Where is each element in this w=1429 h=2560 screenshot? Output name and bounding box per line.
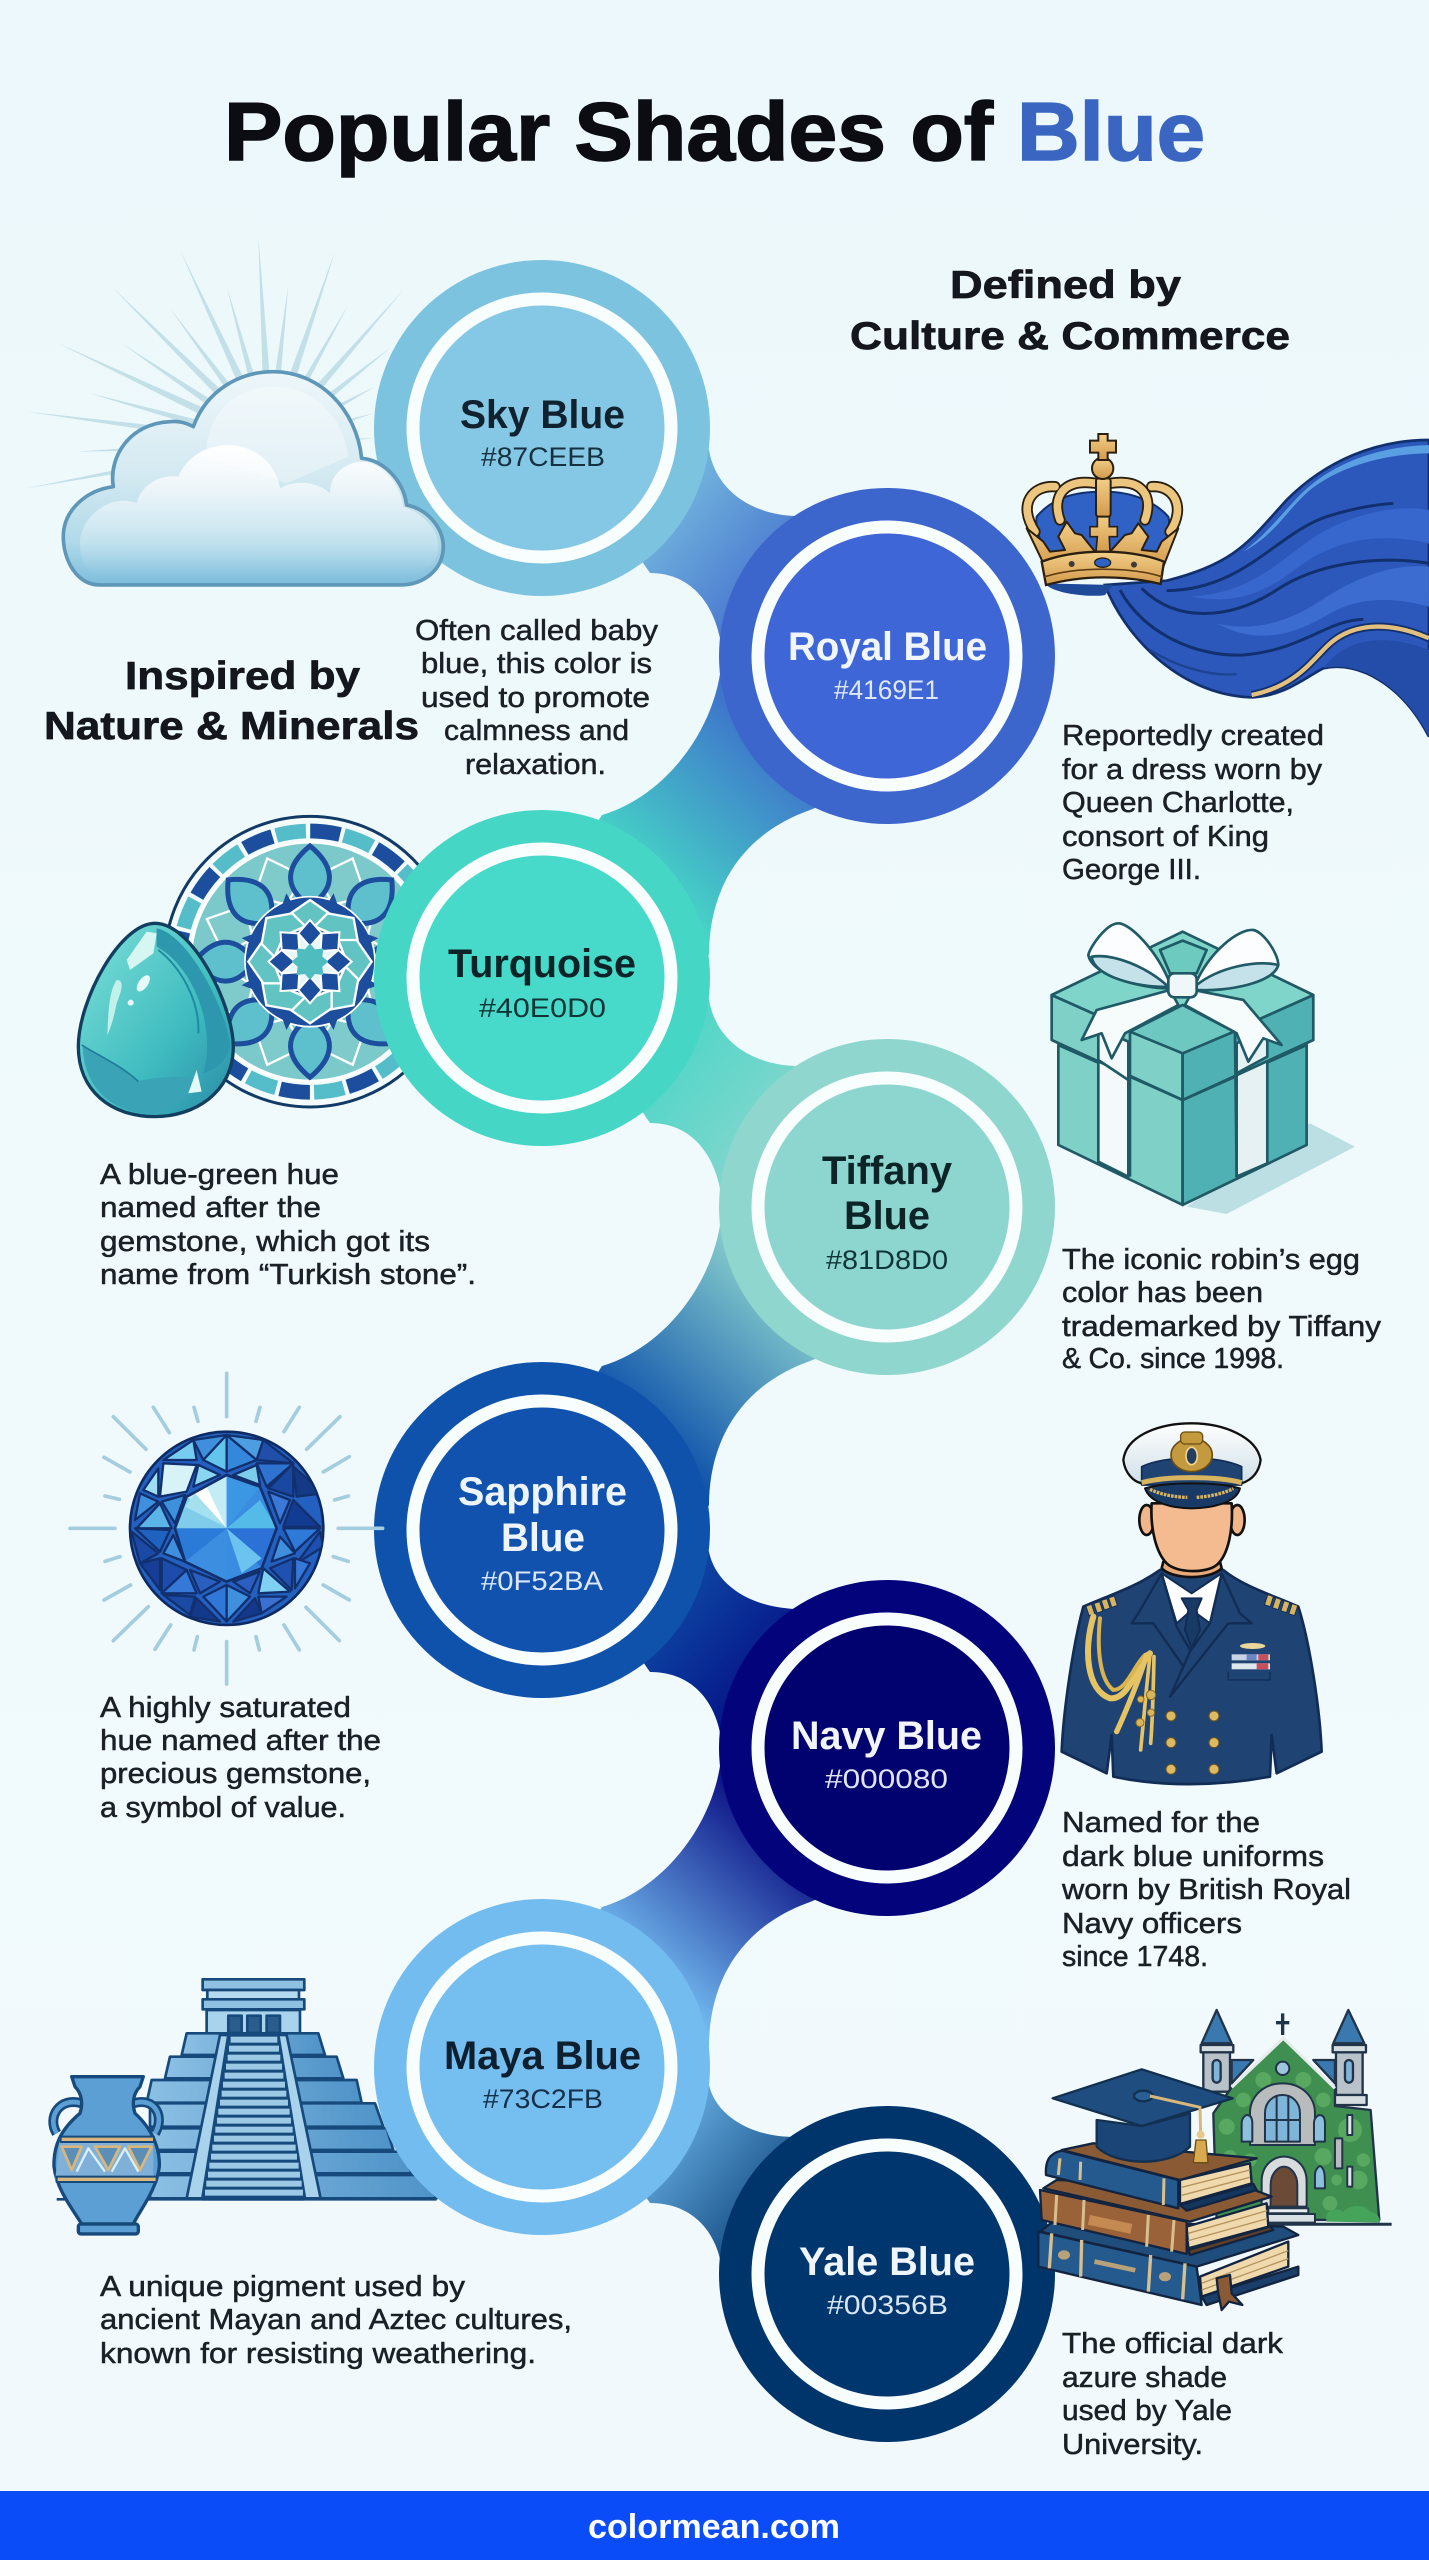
icon: crown and royal drape (1027, 434, 1429, 737)
circle: Navy Blue (719, 1580, 1055, 1916)
circle: Yale Blue: Yale Blue (799, 2240, 975, 2284)
text: Yale Blue description: University. (1062, 2429, 1203, 2461)
drape (1105, 440, 1429, 737)
text: Navy Blue description: worn by British Royal (1061, 1874, 1351, 1906)
circle: Sky Blue (374, 260, 710, 596)
text: Sky Blue description (415, 615, 659, 781)
text: Sapphire Blue description: A highly saturated (100, 1692, 351, 1724)
text: Sky Blue description: relaxation. (465, 749, 606, 781)
circle: Tiffany Blue: #81D8D0 (826, 1245, 948, 1275)
text: Tiffany Blue description: trademarked by Tiffany (1062, 1311, 1382, 1343)
heading: inspired by nature and minerals: Inspired by (125, 655, 360, 698)
circle: Sapphire Blue: Sapphire (458, 1470, 627, 1514)
text: Yale Blue description: The official dark (1062, 2328, 1284, 2360)
front puffs (80, 445, 438, 577)
circle: Navy Blue: Navy Blue (791, 1714, 982, 1758)
vase (53, 2077, 159, 2234)
icon: books, graduation cap and ivy church (1038, 2010, 1392, 2310)
rays (70, 1373, 383, 1684)
text: Maya Blue description: A unique pigment used by (100, 2271, 466, 2303)
text: Navy Blue description (1061, 1807, 1351, 1973)
circle: Sapphire Blue: Blue (501, 1516, 585, 1560)
heading: defined by culture and commerce (850, 264, 1290, 358)
circle: Royal Blue: Royal Blue (788, 625, 987, 669)
circle: Tiffany Blue: Blue (844, 1194, 930, 1238)
church (1201, 2010, 1379, 2220)
middle book (1040, 2180, 1273, 2255)
graduation cap (1053, 2069, 1233, 2162)
circle: Tiffany Blue: Tiffany (822, 1149, 953, 1193)
footer bar: colormean.com (588, 2508, 840, 2546)
buttons (1166, 1711, 1219, 1774)
icon: gift box (1052, 923, 1355, 1214)
text: Navy Blue description: since 1748. (1062, 1941, 1208, 1973)
circle: Royal Blue (719, 488, 1055, 824)
circle: Tiffany Blue (719, 1039, 1055, 1375)
icon: pyramid and vase (53, 1979, 437, 2234)
text: Tiffany Blue description (1062, 1244, 1382, 1375)
text: Royal Blue description: consort of King (1062, 821, 1269, 853)
text: Sky Blue description: used to promote (421, 682, 650, 714)
text: Turquoise description: name from “Turkish stone”. (100, 1259, 476, 1291)
circle: Turquoise: #40E0D0 (479, 993, 606, 1023)
icon: turquoise gemstone (78, 923, 233, 1117)
circle: Maya Blue: Maya Blue (444, 2034, 641, 2078)
text: Sapphire Blue description (100, 1692, 381, 1824)
circle: Sapphire Blue: #0F52BA (481, 1566, 603, 1596)
title: Blue (1017, 85, 1205, 178)
text: Turquoise description: A blue-green hue (100, 1159, 339, 1191)
circle: Turquoise: Turquoise (448, 942, 636, 986)
text: Royal Blue description: George III. (1062, 854, 1201, 886)
text: Sky Blue description: calmness and (444, 715, 629, 747)
circle: Sapphire Blue (374, 1362, 710, 1698)
text: Maya Blue description: ancient Mayan and Aztec cultures, (100, 2304, 572, 2336)
icon: cloud with sun rays (27, 237, 443, 585)
circle: Maya Blue (374, 1899, 710, 2235)
circle: Yale Blue: #00356B (827, 2290, 948, 2320)
text: Turquoise description: named after the (100, 1192, 321, 1224)
text: Navy Blue description: dark blue uniforms (1062, 1841, 1324, 1873)
text: Turquoise description: gemstone, which got its (100, 1226, 430, 1258)
text: Sapphire Blue description: precious gemstone, (100, 1758, 371, 1790)
text: Sapphire Blue description: hue named after the (100, 1725, 381, 1757)
lapels (1132, 1573, 1190, 1673)
heading: inspired by nature and minerals (44, 655, 419, 748)
circle: Yale Blue (719, 2106, 1055, 2442)
circle: Turquoise (374, 810, 710, 1146)
icon: sapphire gem with rays (70, 1373, 383, 1684)
text: Tiffany Blue description: color has been (1062, 1277, 1263, 1309)
text: Tiffany Blue description: The iconic robin’s egg (1062, 1244, 1360, 1276)
text: Yale Blue description: azure shade (1062, 2362, 1227, 2394)
flowing connectors between circles (560, 380, 860, 2270)
text: Navy Blue description: Navy officers (1062, 1908, 1242, 1940)
circle: Royal Blue: #4169E1 (834, 675, 939, 705)
top book (1046, 2143, 1257, 2211)
epaulets (1086, 1595, 1298, 1616)
text: Royal Blue description: Reportedly created (1062, 720, 1324, 752)
text: Sky Blue description: Often called baby (415, 615, 659, 647)
shirt and tie (1162, 1573, 1222, 1623)
circle: Sky Blue: #87CEEB (481, 442, 605, 472)
heading: defined by culture and commerce: Culture & Commerce (850, 315, 1290, 358)
text: Sapphire Blue description: a symbol of value. (100, 1792, 346, 1824)
text: Turquoise description (100, 1159, 476, 1291)
text: Yale Blue description (1062, 2328, 1284, 2461)
title: Popular Shades of (224, 85, 993, 178)
footer bar (0, 2491, 1429, 2560)
text: Maya Blue description (100, 2271, 572, 2370)
bottom book (1038, 2220, 1298, 2310)
aiguillette (1088, 1617, 1154, 1750)
heading: defined by culture and commerce: Defined by (950, 264, 1181, 307)
text: Sky Blue description: blue, this color is (421, 648, 652, 680)
circle: Navy Blue: #000080 (825, 1764, 948, 1794)
face (1139, 1503, 1245, 1577)
cloud body (63, 372, 443, 585)
icon: mosaic medallion (165, 816, 455, 1107)
sun rays (27, 237, 403, 488)
medals (1240, 1643, 1265, 1649)
jacket (1062, 1570, 1322, 1784)
back dome highlight (207, 387, 348, 483)
icon: navy officer (1062, 1423, 1322, 1784)
table fan (175, 1475, 277, 1582)
text: Royal Blue description: Queen Charlotte, (1062, 787, 1294, 819)
heading: inspired by nature and minerals: Nature & Minerals (44, 705, 419, 748)
cap (1123, 1423, 1261, 1508)
text: Maya Blue description: known for resisting weathering. (100, 2338, 536, 2370)
text: Yale Blue description: used by Yale (1062, 2395, 1232, 2427)
pyramid (57, 1979, 437, 2199)
text: Royal Blue description: for a dress worn by (1062, 754, 1323, 786)
text: Navy Blue description: Named for the (1062, 1807, 1260, 1839)
crown (1027, 434, 1178, 596)
circle: Maya Blue: #73C2FB (483, 2084, 603, 2114)
gem (130, 1432, 323, 1625)
text: Royal Blue description (1062, 720, 1324, 886)
circle: Sky Blue: Sky Blue (460, 393, 625, 437)
text: Tiffany Blue description: & Co. since 1998. (1062, 1343, 1284, 1375)
